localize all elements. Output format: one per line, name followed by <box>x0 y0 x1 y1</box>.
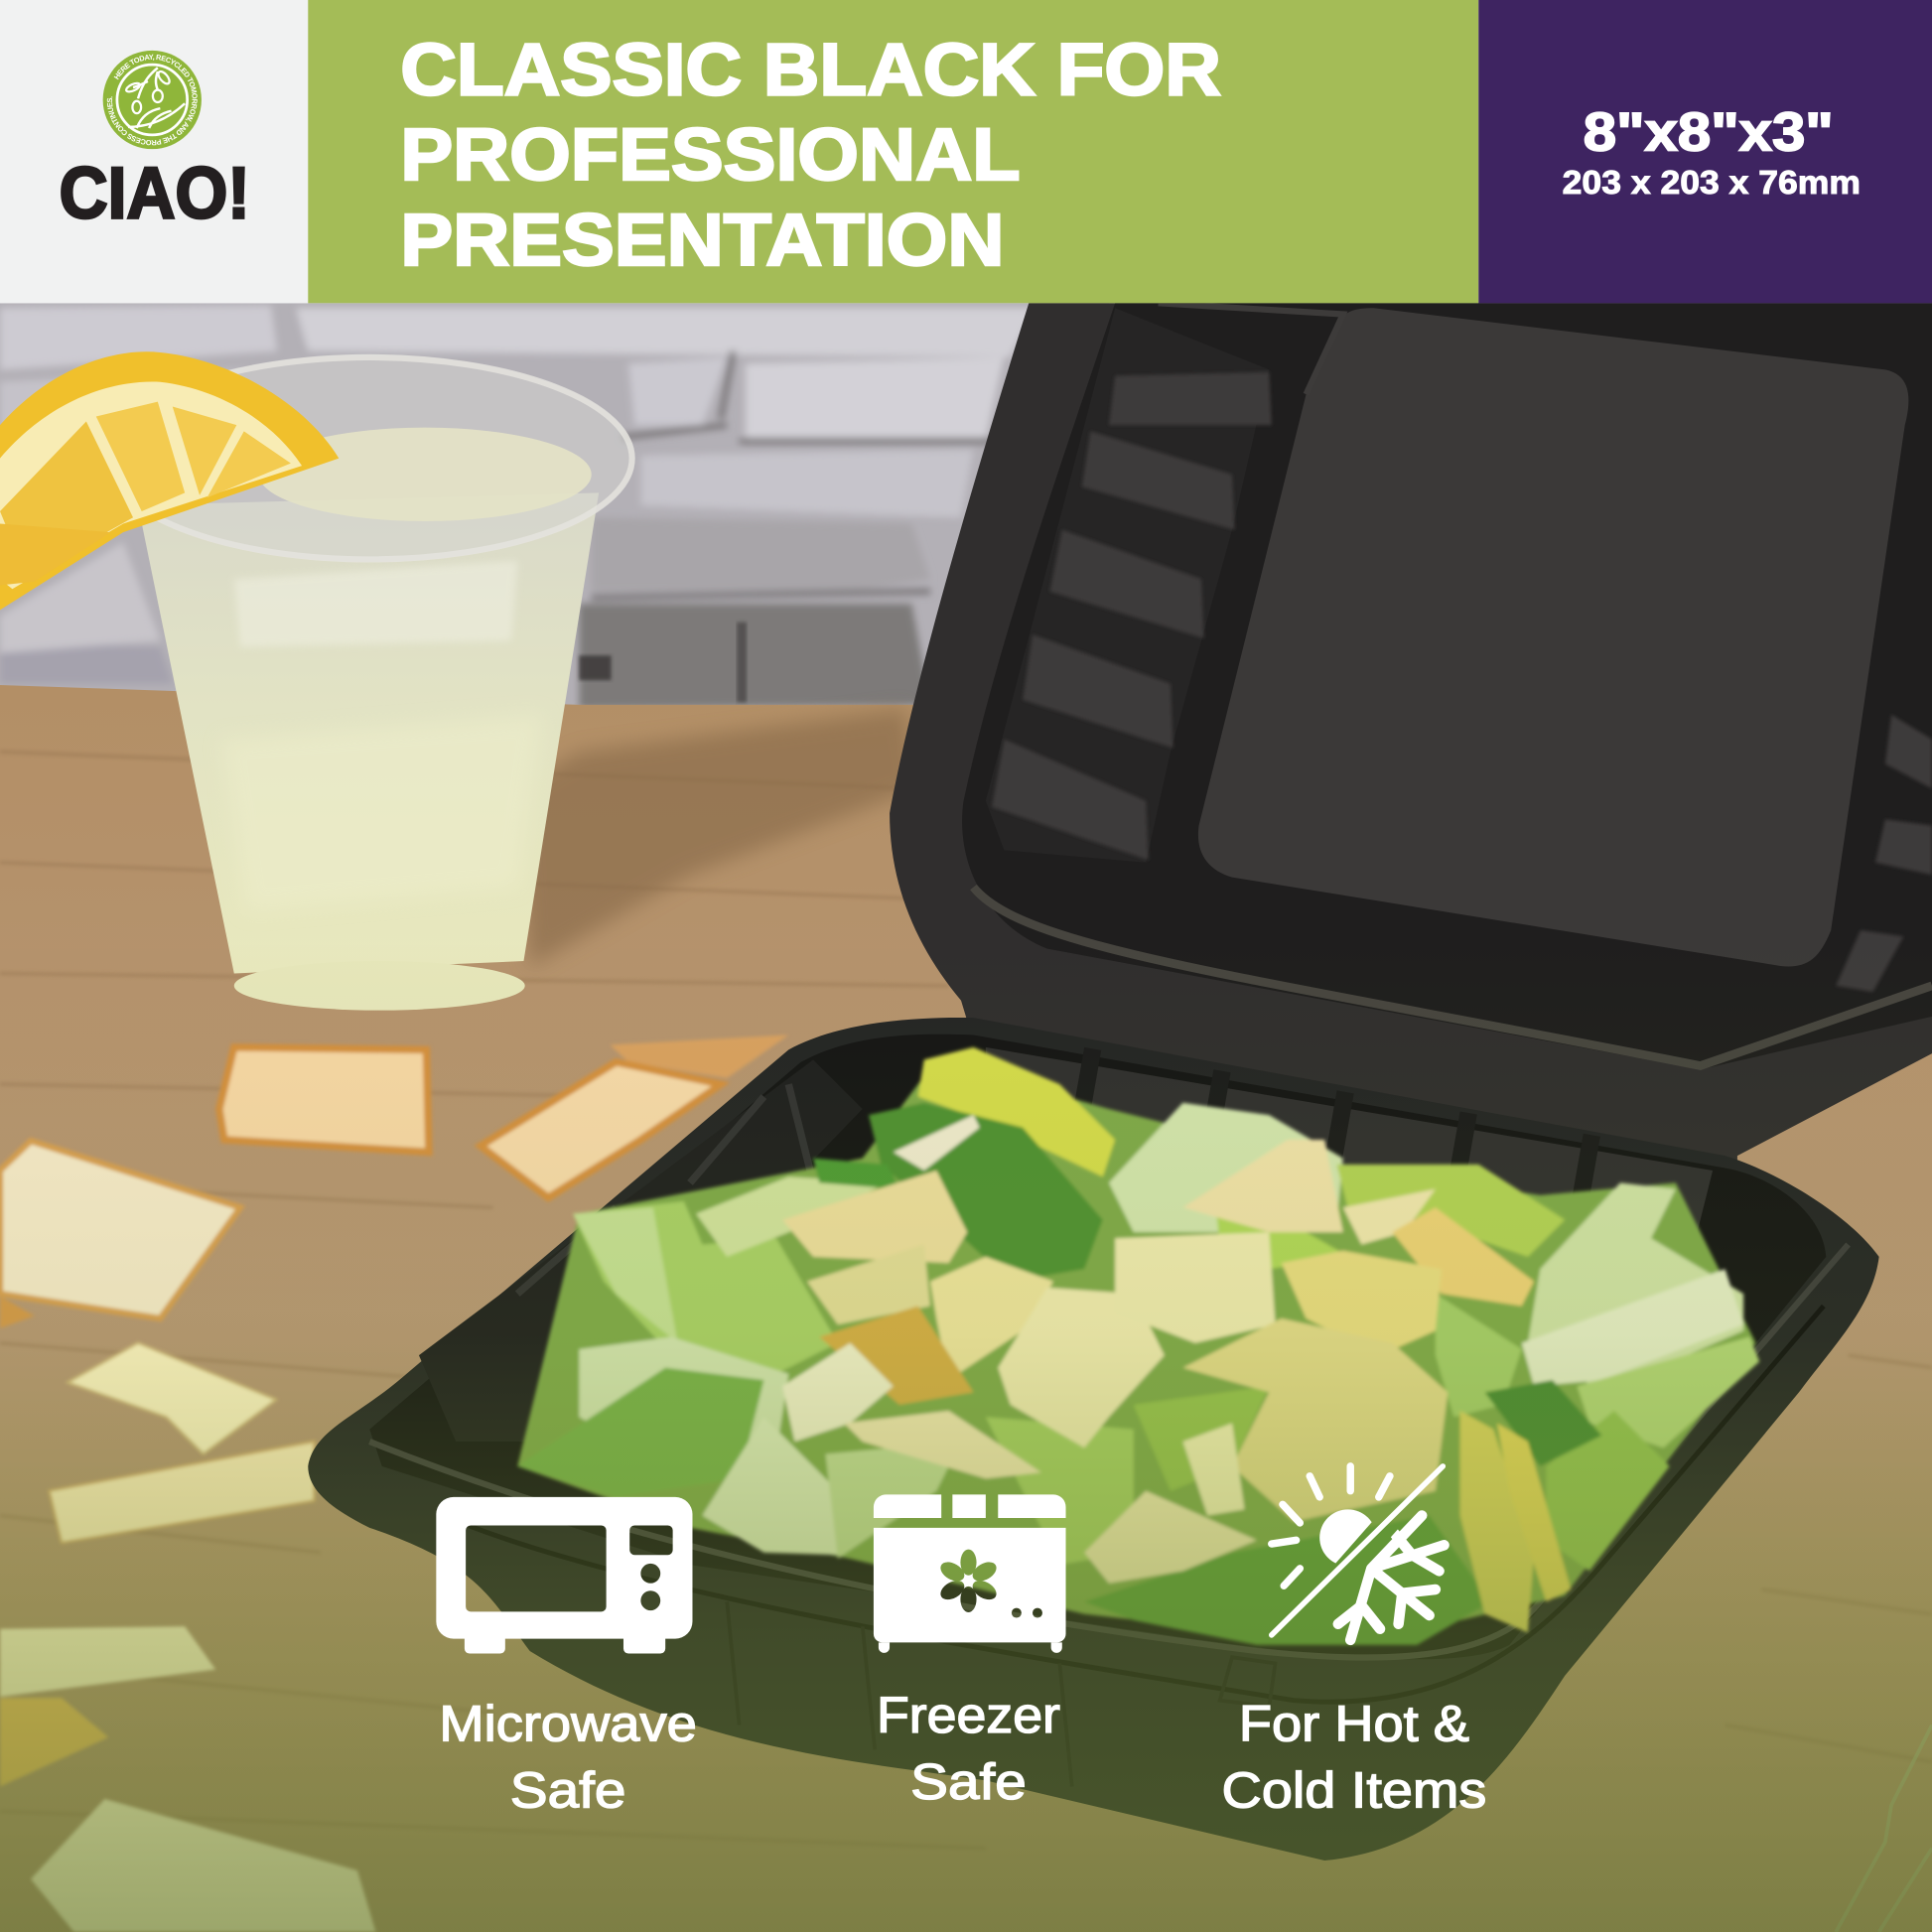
label: Freezer <box>877 1687 1060 1743</box>
header: title banner <box>308 0 1478 303</box>
label: Safe <box>910 1753 1027 1810</box>
brick wall <box>0 303 1109 710</box>
header: logo panel <box>0 0 308 304</box>
fork at bottom right <box>1836 1725 1932 1932</box>
icon: freezer <box>874 1494 1066 1653</box>
plastic cup with lemonade <box>104 354 634 1011</box>
header: size panel <box>1478 0 1932 303</box>
size in inches: 8"x8"x3" <box>1584 101 1834 162</box>
icon: microwave <box>436 1497 692 1654</box>
open black container <box>308 303 1932 1861</box>
salad: lettuce and croutons <box>517 1047 1759 1645</box>
title text: CLASSIC BLACK FOR <box>400 29 1221 111</box>
container lid <box>890 303 1932 1189</box>
label <box>1222 1696 1486 1819</box>
feature: for hot and cold items <box>1222 1466 1486 1819</box>
title text <box>400 29 1221 281</box>
label: Cold Items <box>1222 1762 1486 1819</box>
logo badge: HERE TODAY, RECYCLED TOMORROW, AND THE PROCESS CONTINUES. <box>107 54 198 145</box>
icon: sun and snowflake <box>1272 1466 1445 1640</box>
label: For Hot & <box>1239 1696 1469 1752</box>
wooden table <box>0 685 1932 1932</box>
logo wordmark: CIAO! <box>60 153 250 234</box>
feature: microwave safe <box>436 1497 697 1819</box>
label <box>877 1687 1060 1810</box>
label: Microwave <box>439 1696 697 1752</box>
lemon slice <box>0 351 339 610</box>
feature: freezer safe <box>874 1494 1066 1810</box>
size in millimetres: 203 x 203 x 76mm <box>1563 165 1861 202</box>
container base <box>308 1018 1879 1861</box>
green gradient overlay <box>0 936 1932 1932</box>
title text: PRESENTATION <box>400 199 1004 281</box>
label: Safe <box>510 1762 625 1819</box>
title text: PROFESSIONAL <box>400 113 1021 196</box>
label <box>439 1696 697 1819</box>
crackers on table <box>0 1035 788 1932</box>
